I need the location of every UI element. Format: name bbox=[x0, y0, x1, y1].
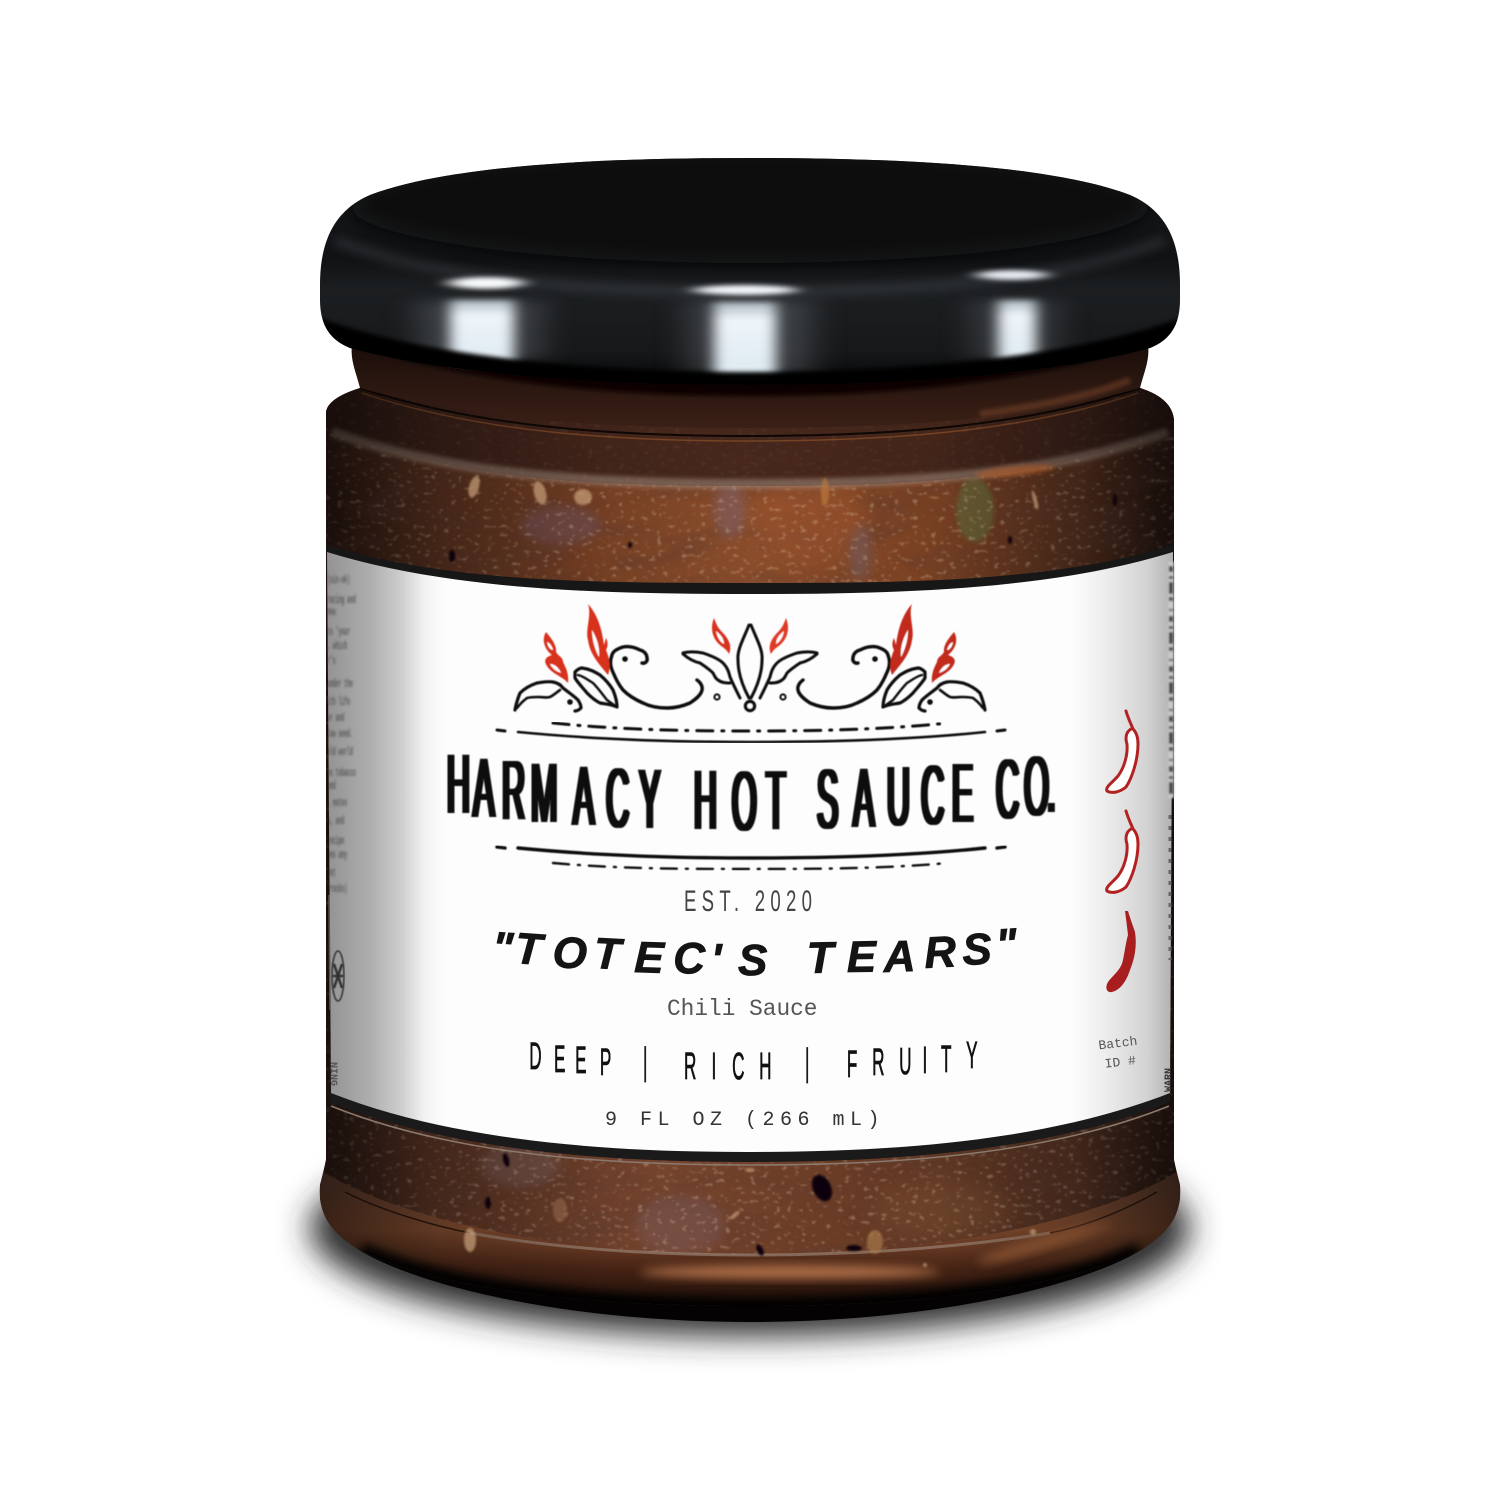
neck highlight bbox=[980, 380, 1130, 414]
base ridge and rim bbox=[320, 1172, 1180, 1306]
flavour notes: DEEP | RICH | FRUITY bbox=[529, 1034, 978, 1088]
warning text right: WARN bbox=[1164, 1068, 1175, 1092]
label bottom black band bbox=[330, 1090, 1170, 1162]
side text left: or and bbox=[327, 710, 344, 725]
side text left: new bbox=[327, 604, 336, 619]
batch id: ID # bbox=[1104, 1053, 1137, 1072]
lid right glint bbox=[976, 270, 1048, 280]
lid right glow bbox=[975, 300, 1055, 360]
title: HARMACY HOT SAUCE CO. bbox=[447, 737, 1056, 849]
side text left: a, and bbox=[327, 813, 344, 828]
side text left: , which bbox=[327, 638, 347, 653]
volume: 9 FL OZ (266 mL) bbox=[605, 1109, 885, 1132]
side text left: (sin-ok) bbox=[327, 572, 350, 587]
lid lower dark edge bbox=[322, 318, 1178, 385]
warning symbol left bbox=[332, 951, 344, 1001]
rim side crease bbox=[345, 1192, 1157, 1233]
sauce dark seeds and light fragments bbox=[449, 410, 1117, 1267]
label bottom thin line bbox=[331, 1106, 1169, 1165]
bottom divider bbox=[497, 847, 1005, 869]
side barcode right bbox=[1168, 562, 1174, 798]
ornament dots bbox=[567, 656, 933, 705]
side text left: Trocks) bbox=[327, 881, 347, 896]
rim copper glow bbox=[640, 1265, 940, 1279]
lid rim sheen bbox=[335, 240, 1165, 292]
lid left glow bbox=[420, 300, 540, 360]
ornament bbox=[515, 604, 985, 711]
thread lines bbox=[360, 388, 1140, 441]
ornament right half bbox=[751, 625, 985, 711]
side text right bbox=[1168, 815, 1172, 960]
ornament left half bbox=[515, 625, 749, 711]
label top black band bbox=[327, 545, 1173, 597]
shoulder band bbox=[320, 380, 1180, 486]
sauce name: "TOTEC'S TEARS" bbox=[490, 920, 1020, 985]
lid bbox=[320, 147, 1180, 395]
side text left: under the bbox=[327, 676, 353, 691]
side text left bbox=[327, 572, 356, 896]
ornament flames right bbox=[770, 604, 956, 683]
rim right copper glow bbox=[976, 1218, 1114, 1268]
label bbox=[327, 545, 1175, 1165]
side text left: and bbox=[327, 778, 336, 793]
side text left: ons any bbox=[327, 847, 347, 862]
established year: EST. 2020 bbox=[684, 885, 817, 918]
jar product bbox=[310, 147, 1190, 1330]
side text left: r's bbox=[327, 653, 336, 668]
side text left: to 'your bbox=[327, 624, 350, 639]
label paper bbox=[327, 552, 1173, 1152]
side text left: ns tobacco bbox=[327, 765, 356, 780]
side text left: , notes bbox=[327, 795, 347, 810]
heat rating chili filled bbox=[1106, 911, 1136, 992]
lid right reflection bbox=[998, 300, 1036, 370]
sauce colour blotches bbox=[480, 478, 1010, 1255]
side text left: low seed. bbox=[327, 726, 353, 741]
jar body with sauce bbox=[310, 380, 1190, 1330]
heat rating chili outline two bbox=[1107, 811, 1138, 892]
side text left: recipe bbox=[327, 833, 345, 848]
shoulder copper glint bbox=[975, 462, 1055, 480]
lid centre glow bbox=[690, 300, 810, 375]
ornament ball bbox=[746, 702, 754, 710]
lid left reflection bbox=[450, 300, 514, 370]
lid top face bbox=[350, 147, 1150, 263]
product type: Chili Sauce bbox=[667, 996, 817, 1022]
left side rule bbox=[329, 895, 330, 1010]
lid centre glint bbox=[693, 285, 797, 295]
side shading bbox=[320, 380, 1180, 1330]
ornament flames left bbox=[544, 604, 730, 683]
jar neck bbox=[352, 338, 1148, 428]
rim lower fade bbox=[360, 1252, 1140, 1308]
rim highlight line bbox=[470, 1233, 1050, 1255]
top divider bbox=[497, 723, 1005, 742]
batch id bbox=[1098, 1034, 1141, 1072]
side text left: ent bbox=[327, 865, 336, 880]
lid centre reflection bbox=[714, 302, 776, 382]
left side small text: NING bbox=[327, 1062, 338, 1086]
jar drop shadow bbox=[310, 1120, 1190, 1336]
heat rating chili outline one bbox=[1107, 711, 1138, 792]
side text left: racing and bbox=[327, 592, 356, 607]
side text left: old world bbox=[327, 744, 353, 759]
neck shadow under lid bbox=[352, 338, 1148, 396]
batch id: Batch bbox=[1098, 1034, 1138, 1053]
shoulder highlight bbox=[332, 432, 1168, 484]
side text left: ith life bbox=[327, 694, 350, 709]
jar base dark foot bbox=[335, 1225, 1165, 1322]
lid left glint bbox=[448, 277, 524, 289]
